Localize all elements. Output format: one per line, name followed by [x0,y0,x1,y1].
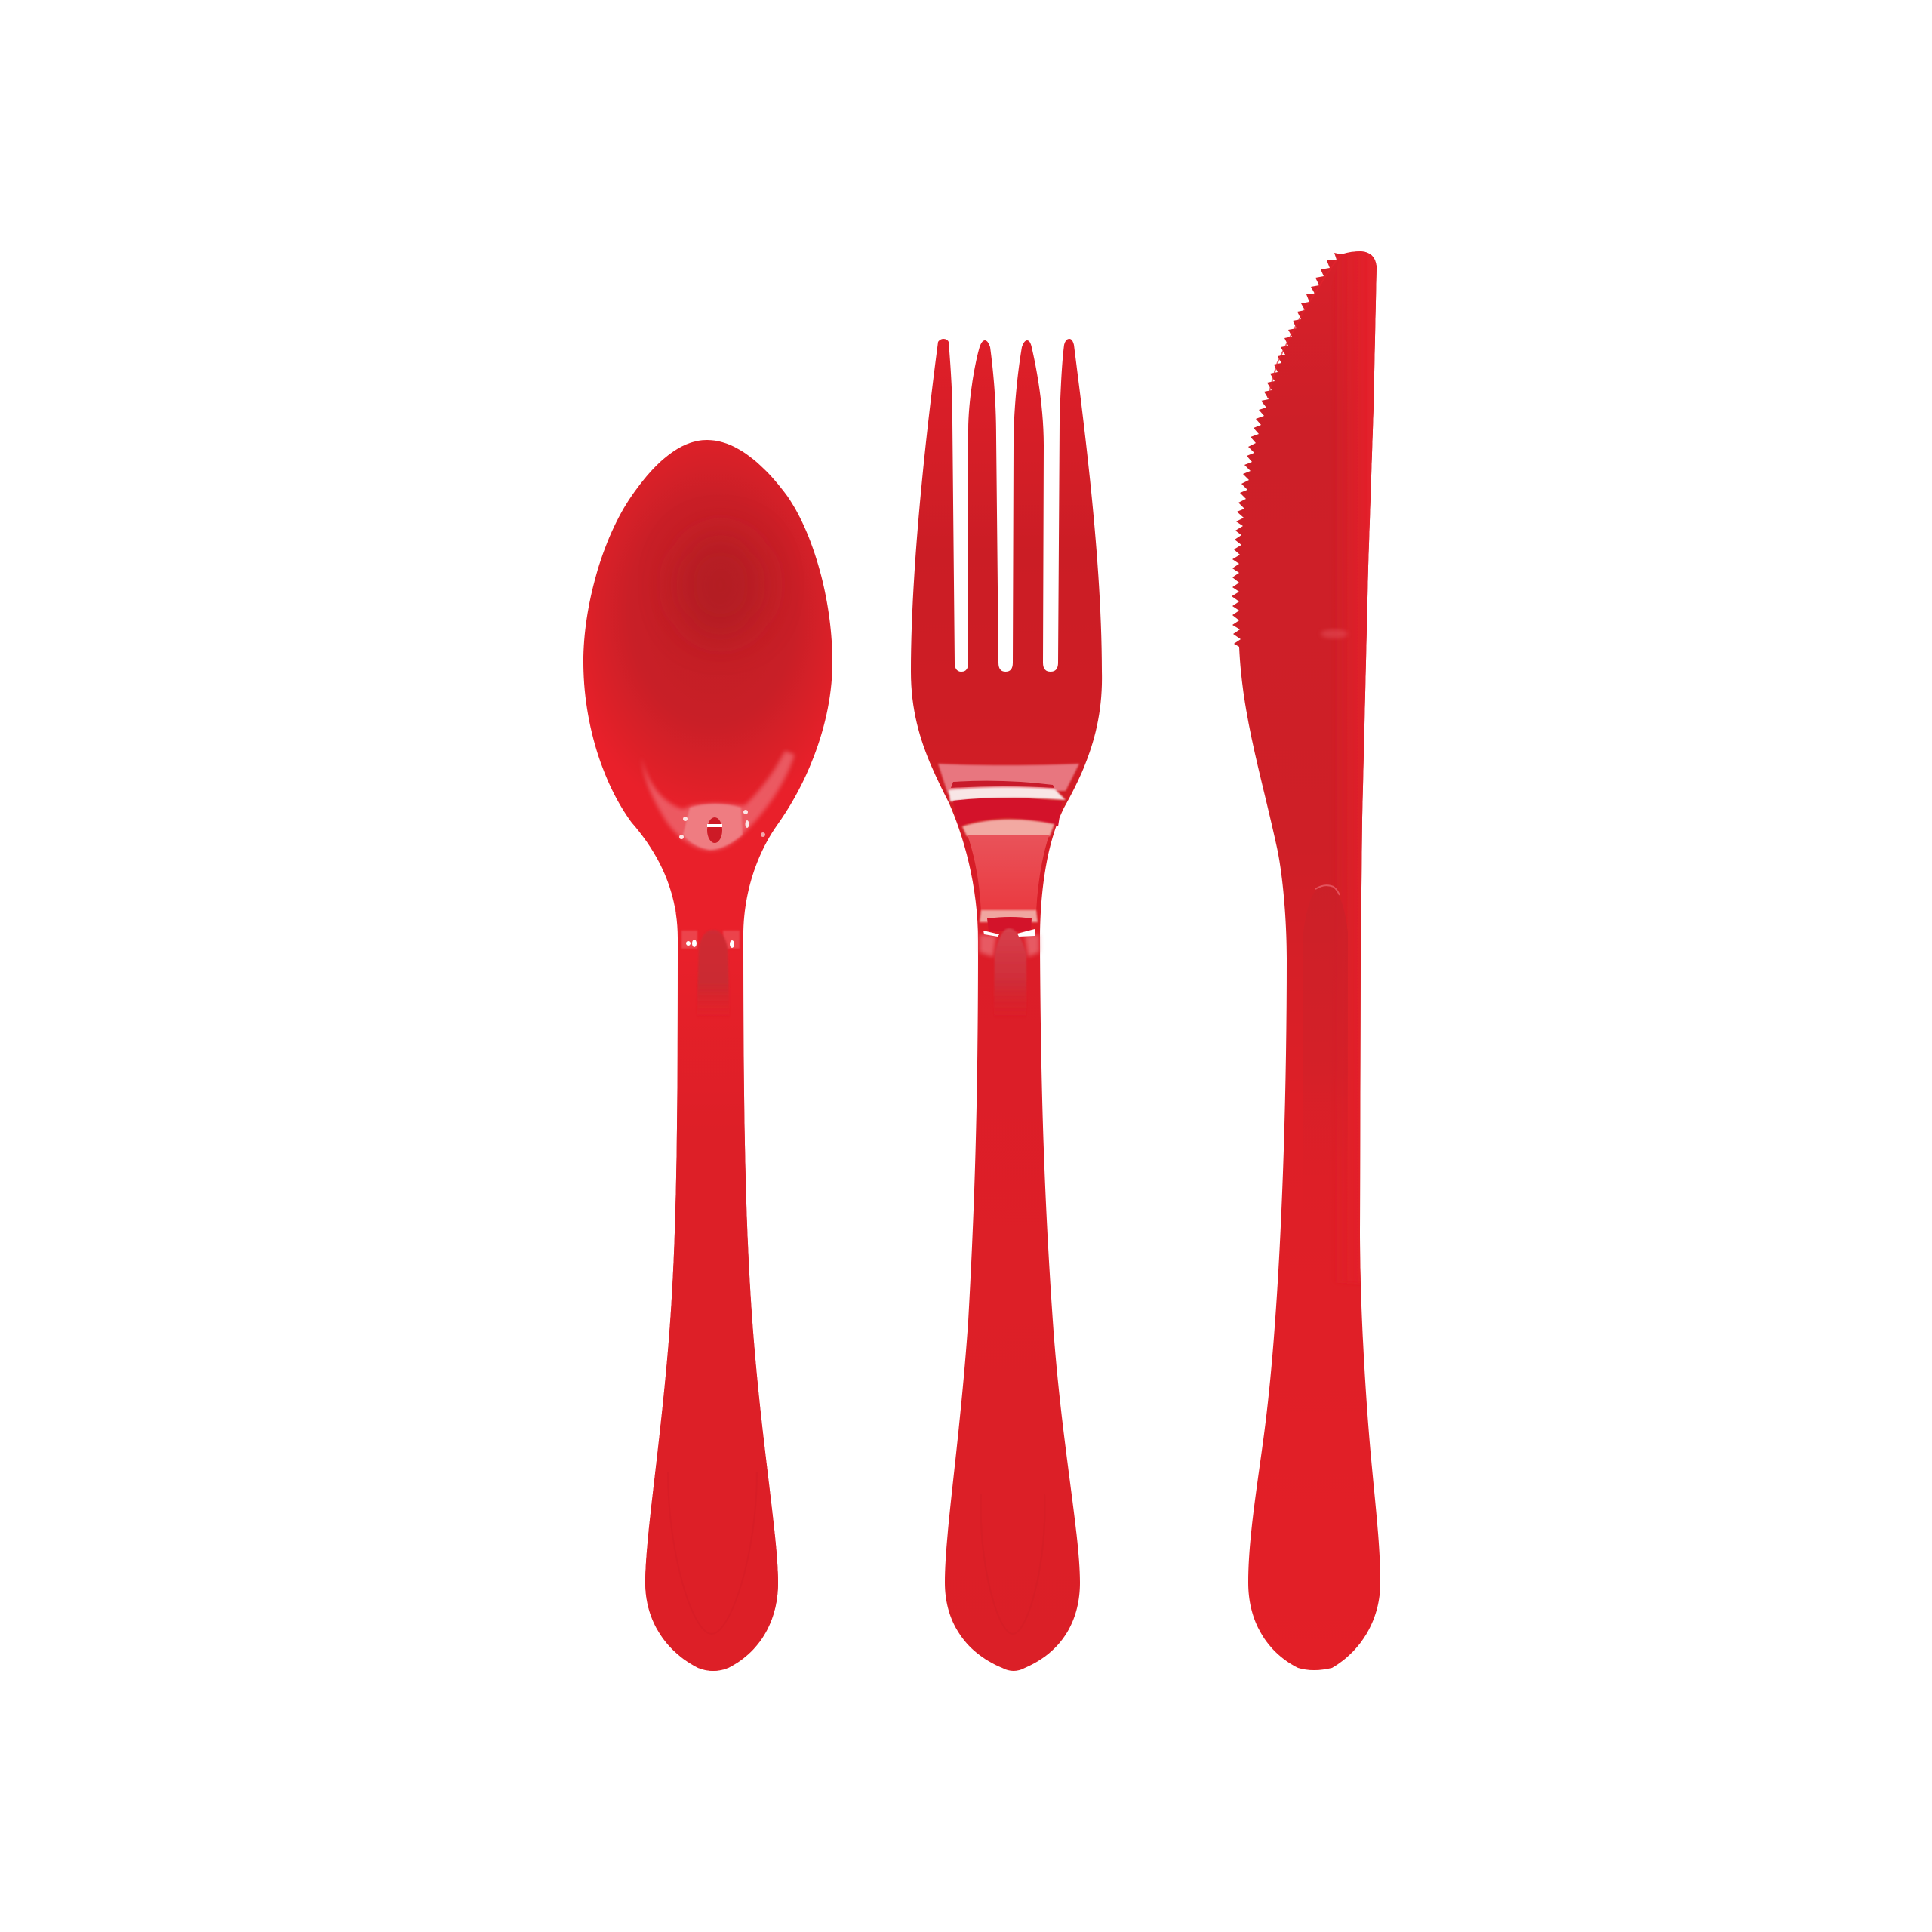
fork [911,339,1102,1671]
fork neck light band [938,764,1079,794]
fork collar pale band [980,910,1038,922]
spoon handle bump [697,930,729,1002]
fork pink panel [968,835,1049,912]
spoon collar marks [681,931,740,949]
knife [1232,242,1385,1670]
spoon dimple [679,810,765,843]
knife details clipped to shape [1342,251,1377,1281]
fork handle end oval [981,1494,1044,1634]
spoon handle colour [645,991,778,1671]
fork collar dark patch [987,917,1032,931]
spoon crescent highlight [641,751,795,851]
fork silhouette [911,339,1102,1671]
spoon handle end oval [668,1472,757,1634]
knife bump rim glint [1315,885,1340,895]
knife silhouette with serrated edge [1232,251,1380,1670]
fork dark band [953,798,1062,827]
spoon bowl dark centre [679,535,764,631]
spoon details clipped to shape [634,532,795,1675]
spoon neck edge glints [674,904,743,936]
fork handle bump [994,928,1026,1019]
spoon silhouette [583,440,832,1671]
fork collar lower glow [980,934,1039,957]
knife spine brighter edge [1342,251,1377,1281]
fork collar glints [983,929,1035,937]
fork white glint band [949,787,1066,801]
illustration: red cutlery set [583,251,1380,1671]
knife edge ridge [1268,255,1341,398]
spoon centre highlight [683,804,743,850]
fork pale band [962,820,1054,836]
fork thin dark band [951,781,1054,788]
spoon [583,440,832,1675]
knife blade scuff [1321,629,1348,638]
knife handle bump [1337,897,1348,1078]
